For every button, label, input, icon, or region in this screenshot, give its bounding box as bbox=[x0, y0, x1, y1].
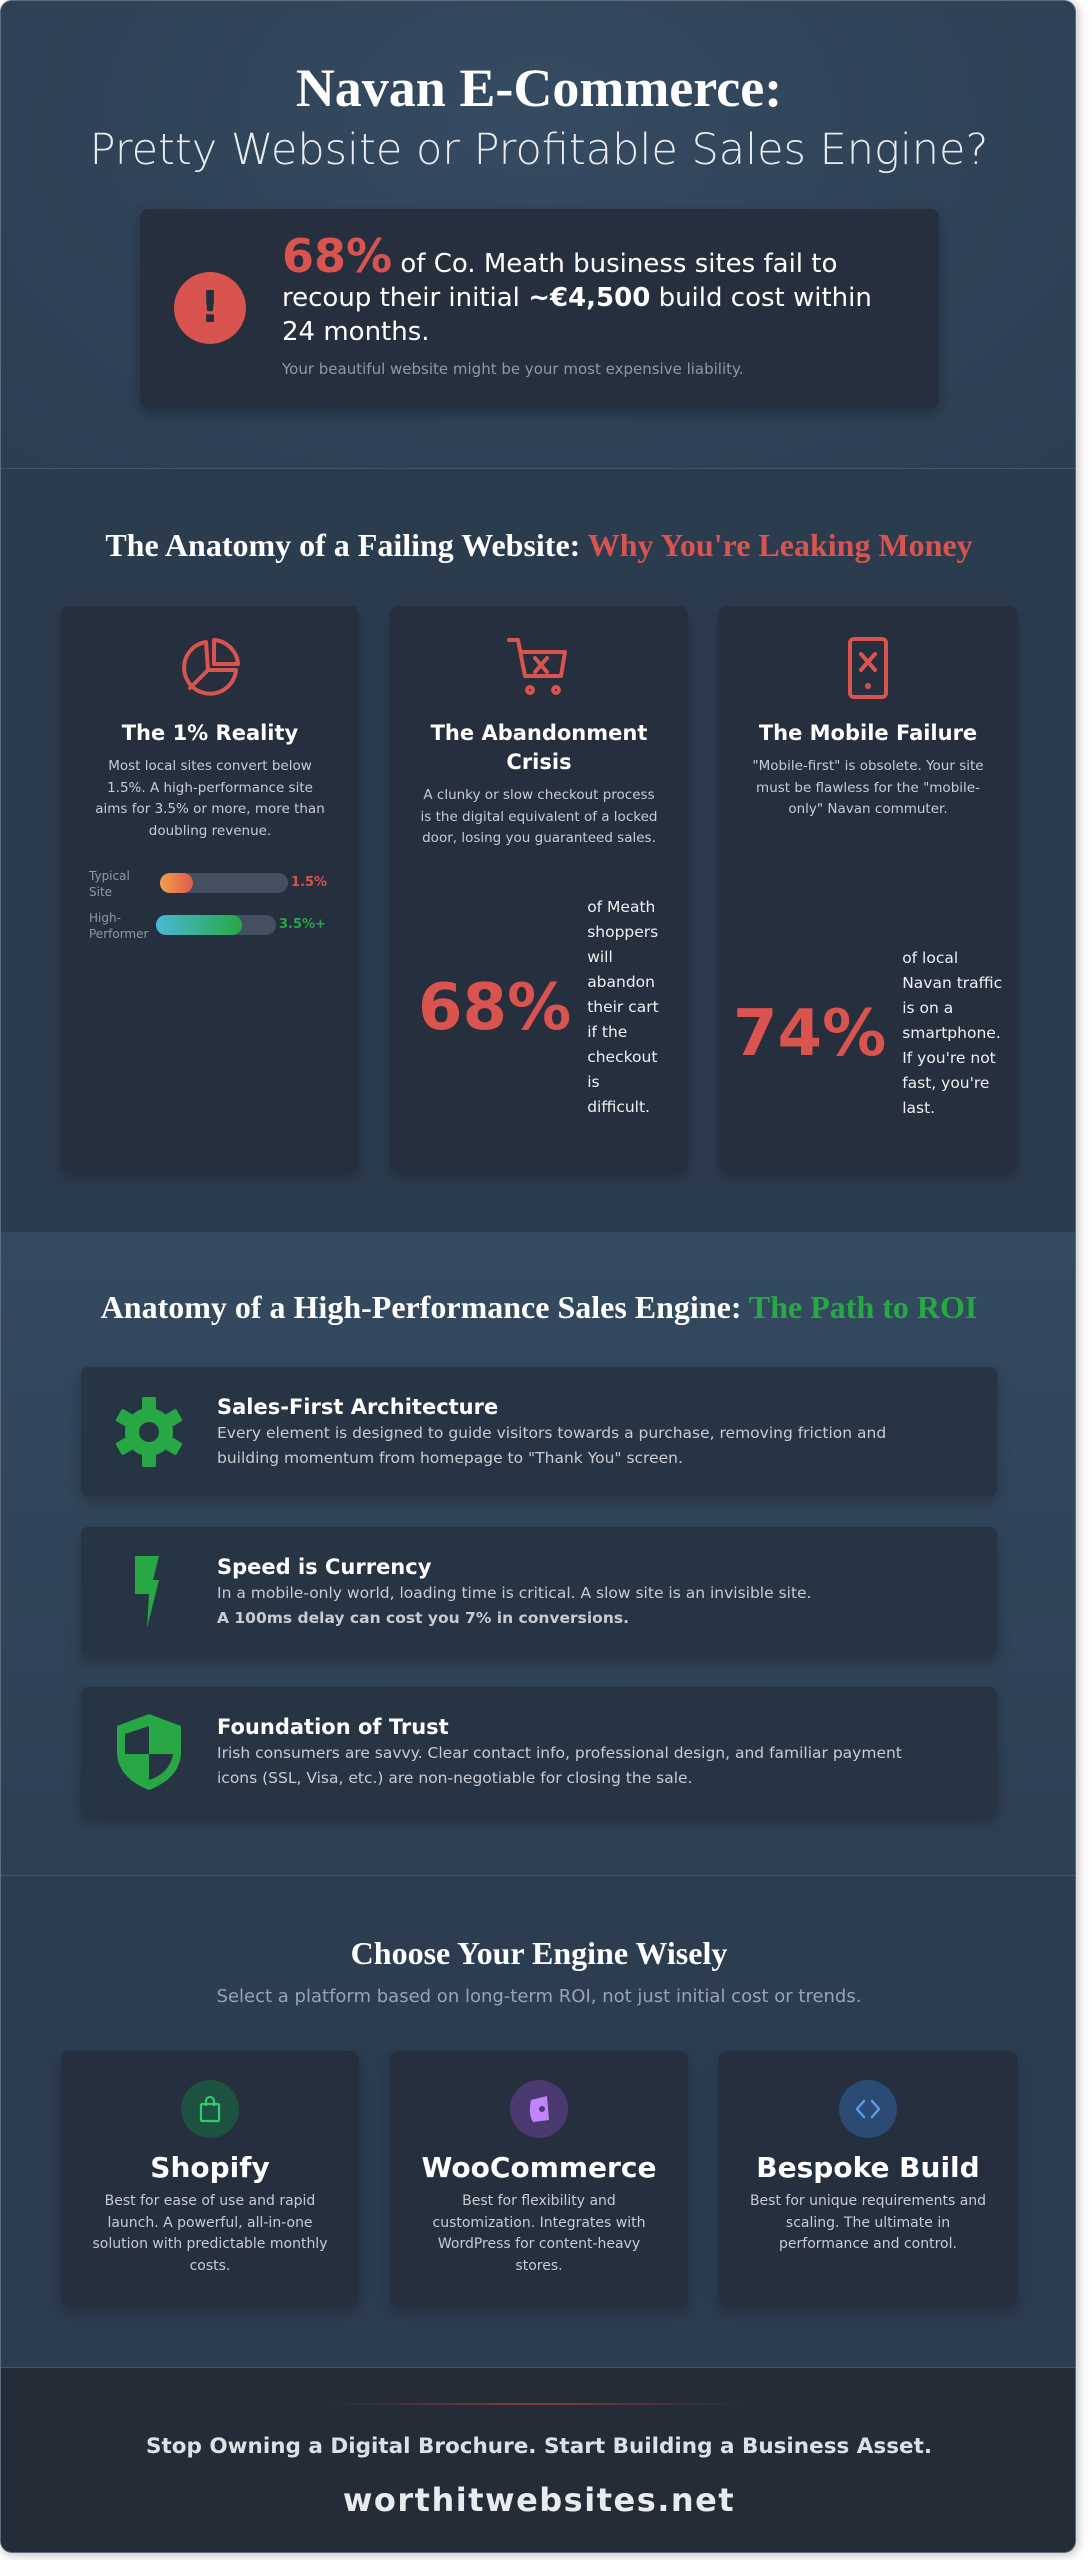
text: Speed is Currency bbox=[217, 1554, 431, 1578]
icon: code bbox=[839, 2080, 897, 2138]
title: Bespoke Build bbox=[756, 2151, 980, 2184]
text: "Mobile-first" is obsolete. Your site must be flawless for the "mobile-only" Navan commuter. bbox=[752, 758, 984, 817]
icon: cart x bbox=[507, 638, 567, 695]
panel: sales-first architecture bbox=[81, 1367, 997, 1496]
heading: The Anatomy of a Failing Website: Why You're Leaking Money bbox=[105, 527, 973, 563]
icon: bolt bbox=[135, 1556, 159, 1628]
text: Every element is designed to guide visitors towards a purchase, removing friction and building momentum from homepage to "Thank You" screen. bbox=[217, 1424, 886, 1466]
subtitle: Pretty Website or Profitable Sales Engine? bbox=[90, 125, 988, 175]
icon: bag bbox=[181, 2080, 239, 2138]
stat: 74%: 74% bbox=[733, 996, 886, 1070]
title: Navan E-Commerce: bbox=[296, 58, 782, 118]
bar chart: 1.5% bbox=[291, 875, 327, 890]
panel: foundation of trust bbox=[81, 1687, 997, 1816]
title: Shopify bbox=[150, 2151, 270, 2184]
icon: phone x bbox=[848, 637, 888, 699]
bar chart: Site bbox=[89, 885, 112, 899]
stat: 68%: of Meath shoppers will abandon their cart if the checkout is difficult. bbox=[587, 898, 659, 1116]
section: footer bbox=[1, 2367, 1077, 2555]
callout: alert box bbox=[140, 209, 939, 408]
icon: exclamation: ! bbox=[200, 282, 220, 333]
stat: 68% bbox=[418, 898, 659, 1116]
icon: exclamation bbox=[174, 272, 246, 344]
text: Best for flexibility and customization. Integrates with WordPress for content-heavy stores. bbox=[433, 2193, 645, 2274]
heading: Choose Your Engine Wisely bbox=[351, 1935, 727, 1971]
subtitle: Select a platform based on long-term ROI, not just initial cost or trends. bbox=[217, 1986, 861, 2007]
text bbox=[217, 1714, 902, 1786]
text: Best for unique requirements and scaling. The ultimate in performance and control. bbox=[750, 2193, 986, 2252]
title: The Mobile Failure bbox=[759, 721, 977, 745]
alert subtext: Your beautiful website might be your most expensive liability. bbox=[282, 360, 744, 378]
text: Foundation of Trust bbox=[217, 1714, 449, 1738]
stat: 68%: 68% bbox=[418, 970, 571, 1044]
panel: speed is currency bbox=[81, 1527, 997, 1656]
bar chart: Typical bbox=[89, 869, 130, 883]
stat: 74% bbox=[733, 949, 1002, 1117]
stat: 74%: of local Navan traffic is on a smartphone. If you're not fast, you're last. bbox=[902, 949, 1002, 1117]
icon: gear bbox=[116, 1397, 182, 1467]
text: Most local sites convert below 1.5%. A high-performance site aims for 3.5% or more, more than doubling revenue. bbox=[95, 758, 325, 838]
text: In a mobile-only world, loading time is critical. A slow site is an invisible site. bbox=[217, 1584, 812, 1602]
panel: mobile failure bbox=[719, 606, 1017, 1172]
text: A 100ms delay can cost you 7% in conversions. bbox=[217, 1608, 629, 1626]
footer tagline: Stop Owning a Digital Brochure. Start Building a Business Asset. bbox=[146, 2434, 932, 2459]
title: WooCommerce bbox=[422, 2151, 656, 2184]
bar chart: Performer bbox=[89, 927, 148, 941]
footer domain: worthitwebsites.net bbox=[343, 2481, 735, 2519]
text bbox=[217, 1394, 886, 1466]
text: Sales-First Architecture bbox=[217, 1394, 498, 1418]
text bbox=[217, 1554, 812, 1626]
title: The 1% Reality bbox=[122, 721, 298, 745]
icon: woo bbox=[510, 2080, 568, 2138]
icon: pie chart bbox=[182, 638, 240, 696]
section: failing website bbox=[1, 469, 1077, 1232]
text: Irish consumers are savvy. Clear contact info, professional design, and familiar payment icons (SSL, Visa, etc.) are non-negotiable for closing the sale. bbox=[217, 1744, 902, 1786]
section: choose engine bbox=[1, 1877, 1077, 2367]
panel: 1% reality bbox=[61, 606, 359, 1172]
icon: shield bbox=[117, 1714, 181, 1790]
heading: Anatomy of a High-Performance Sales Engine: The Path to ROI bbox=[101, 1289, 977, 1325]
section: sales engine bbox=[1, 1232, 1077, 1876]
title: The Abandonment Crisis bbox=[431, 721, 647, 774]
text: A clunky or slow checkout process is the digital equivalent of a locked door, losing you guaranteed sales. bbox=[421, 787, 657, 846]
panel: shopify bbox=[61, 2051, 359, 2306]
text: Best for ease of use and rapid launch. A powerful, all-in-one solution with predictable monthly costs. bbox=[92, 2193, 328, 2274]
alert text: 68% of Co. Meath business sites fail to recoup their initial ~€4,500 build cost within 24 months. bbox=[282, 229, 872, 347]
bar chart: High- bbox=[89, 911, 121, 925]
panel: bespoke build bbox=[719, 2051, 1017, 2306]
panel: woocommerce bbox=[390, 2051, 688, 2306]
bar chart bbox=[89, 869, 327, 941]
section: hero bbox=[1, 1, 1077, 469]
panel: abandonment crisis bbox=[390, 606, 688, 1172]
bar chart: 3.5%+ bbox=[279, 917, 326, 932]
